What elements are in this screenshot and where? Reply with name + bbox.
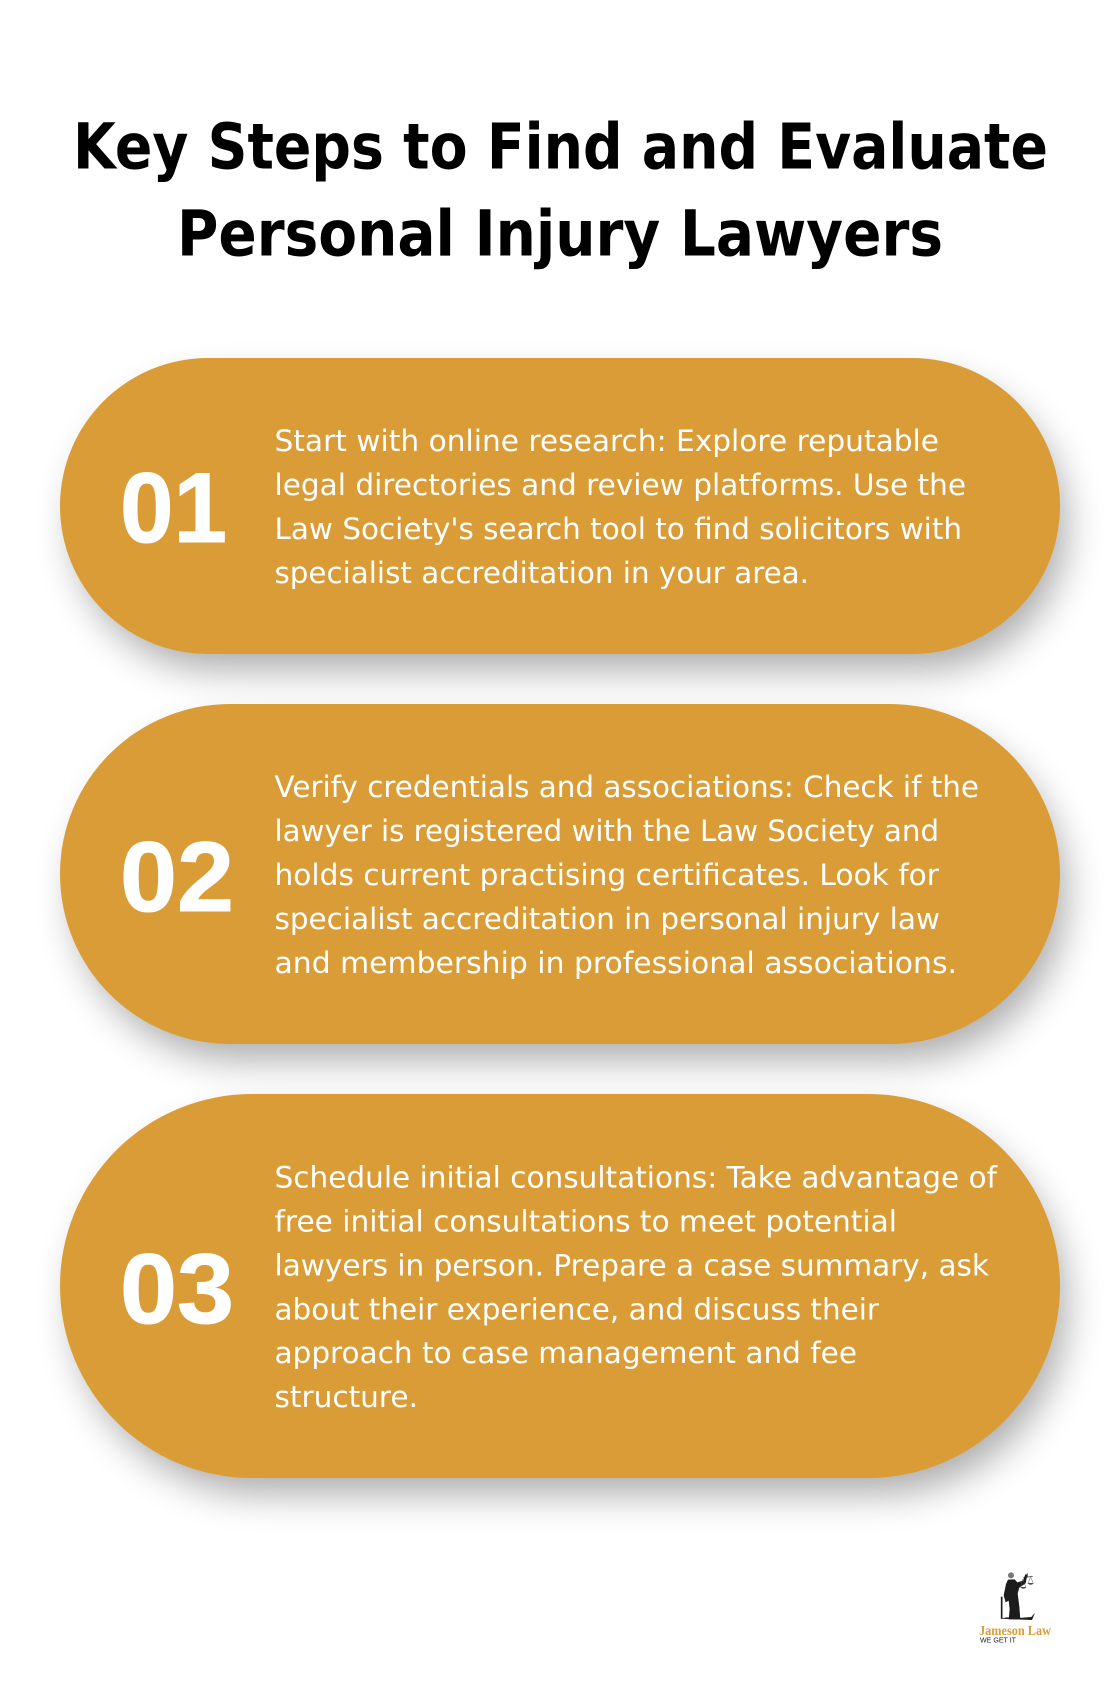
step 01 text: legal directories and review platforms. Use the bbox=[274, 468, 966, 502]
step 01 text bbox=[274, 424, 966, 590]
step 02 text: specialist accreditation in personal injury law bbox=[274, 902, 940, 936]
step 03 text: lawyers in person. Prepare a case summary, ask bbox=[274, 1248, 989, 1282]
title: Personal Injury Lawyers bbox=[177, 198, 943, 270]
step 03 text: Schedule initial consultations: Take advantage of bbox=[274, 1160, 998, 1194]
step 01 text: Law Society's search tool to find solicitors with bbox=[274, 512, 962, 546]
step 03 text: approach to case management and fee bbox=[274, 1336, 857, 1370]
logo tagline: WE GET IT bbox=[980, 1636, 1016, 1644]
logo name: Jameson Law bbox=[979, 1623, 1051, 1638]
logo: Jameson Law bbox=[979, 1572, 1051, 1644]
step number 01: 01 bbox=[120, 452, 227, 563]
step number 02: 02 bbox=[120, 821, 234, 932]
step 01 text: specialist accreditation in your area. bbox=[274, 556, 809, 590]
icon: lady justice with letter L bbox=[1000, 1572, 1035, 1620]
step 02 text: holds current practising certificates. Look for bbox=[274, 858, 940, 892]
step 01 text: Start with online research: Explore reputable bbox=[274, 424, 939, 458]
step 03 text bbox=[274, 1160, 998, 1414]
panel: step 02 bbox=[60, 704, 1060, 1044]
step 03 text: about their experience, and discuss their bbox=[274, 1292, 880, 1326]
step number 03: 03 bbox=[120, 1233, 234, 1344]
panel: step 03 bbox=[60, 1094, 1060, 1478]
step 03 text: structure. bbox=[274, 1380, 418, 1414]
step 03 text: free initial consultations to meet potential bbox=[274, 1204, 897, 1238]
step 02 text: lawyer is registered with the Law Society and bbox=[274, 814, 939, 848]
step 02 text bbox=[274, 770, 979, 980]
title bbox=[73, 110, 1048, 270]
step 02 text: and membership in professional associations. bbox=[274, 946, 957, 980]
step 02 text: Verify credentials and associations: Check if the bbox=[274, 770, 979, 804]
panel: step 01 bbox=[60, 358, 1060, 654]
